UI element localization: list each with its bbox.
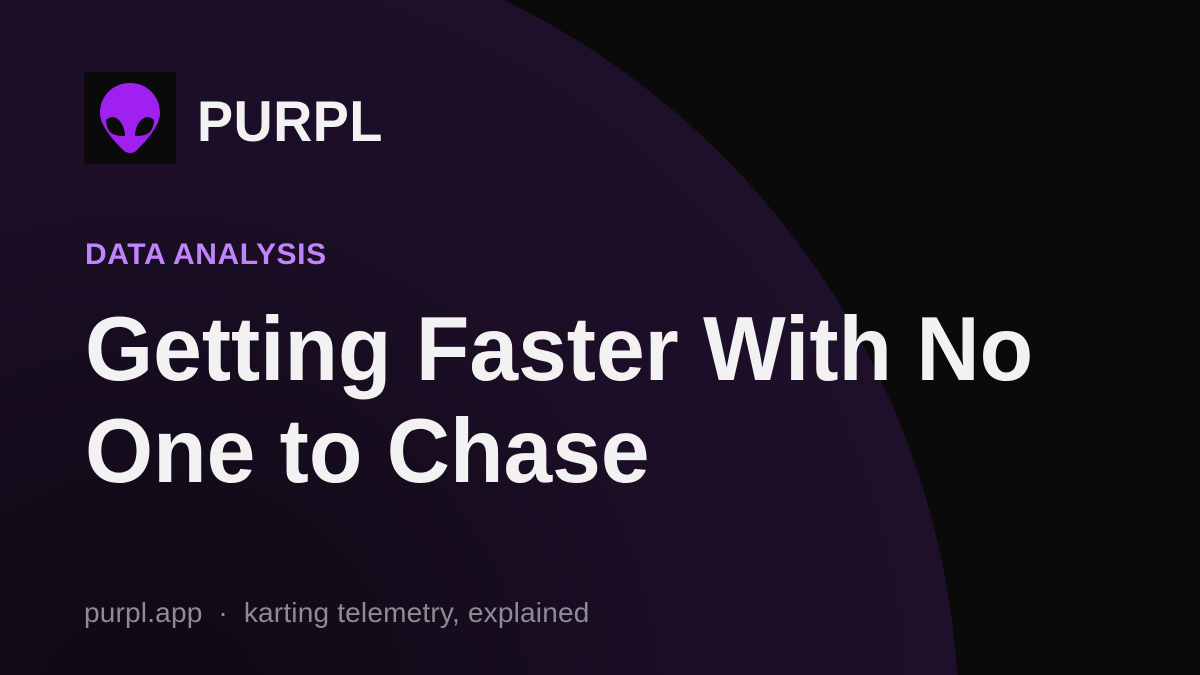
category label: DATA ANALYSIS bbox=[85, 238, 327, 271]
background purple circle bbox=[0, 0, 957, 675]
icon: alien head bbox=[100, 83, 160, 153]
logo badge bbox=[84, 72, 176, 164]
footer text: purpl.app · karting telemetry, explained bbox=[84, 597, 590, 628]
title: One to Chase bbox=[85, 399, 650, 501]
title bbox=[85, 297, 1033, 501]
title: Getting Faster With No bbox=[85, 297, 1033, 399]
brand name: PURPL bbox=[197, 88, 383, 153]
